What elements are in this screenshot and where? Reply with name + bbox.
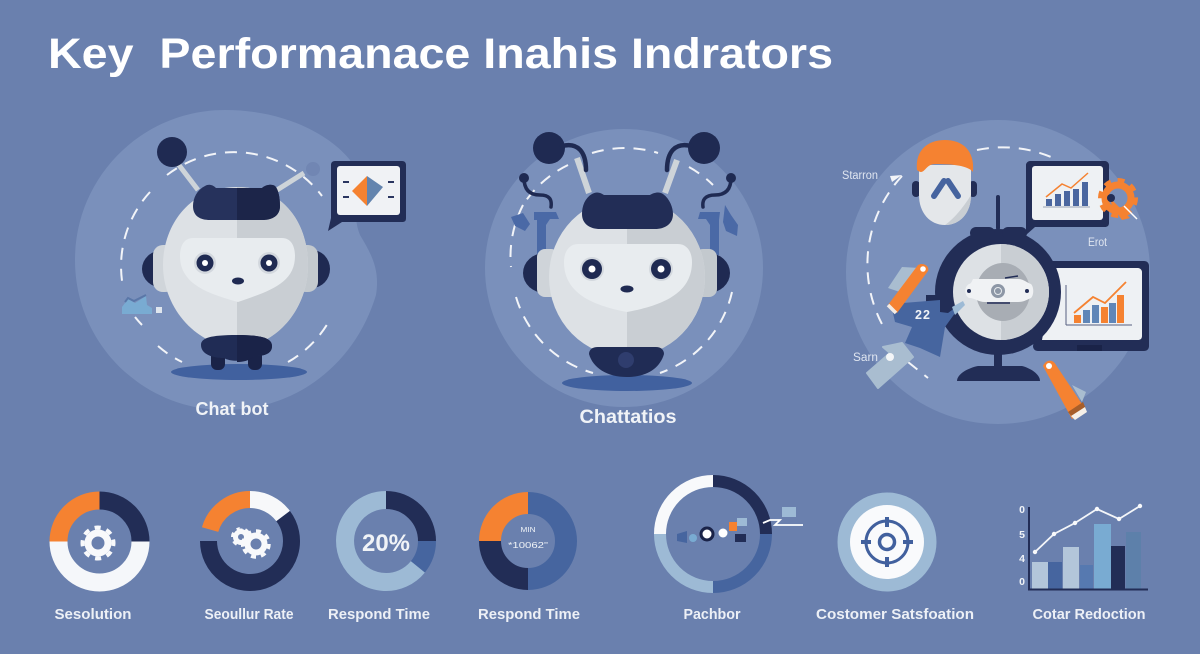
background circle <box>485 129 763 407</box>
face plate <box>180 238 295 302</box>
label: Sesolution <box>54 606 132 623</box>
kpi: cost reduction chart <box>1019 504 1148 623</box>
donut segments <box>208 500 291 583</box>
axis values: 4 <box>1019 553 1025 565</box>
axis values <box>1019 504 1025 588</box>
dashed orbit <box>510 148 732 373</box>
kpi: sesolution donut <box>54 500 140 623</box>
axis values: 0 <box>1019 504 1025 516</box>
side label: Erot <box>1088 237 1108 249</box>
blue side pylons <box>511 205 738 255</box>
base <box>589 347 664 377</box>
face plate <box>564 244 692 312</box>
unit: MIN <box>520 525 536 534</box>
pointer flag <box>763 507 803 525</box>
label: Respond Time <box>478 606 580 623</box>
panel: support hub <box>842 120 1150 424</box>
blue hand tool: 22 <box>915 308 931 322</box>
value: 20% <box>362 530 410 557</box>
kpi: respond time min donut <box>478 503 580 623</box>
label: Chat bot <box>196 399 269 419</box>
antennas <box>157 137 320 190</box>
orange gear <box>1100 180 1137 220</box>
feet <box>201 335 272 370</box>
value: *10062" <box>508 541 548 550</box>
eyes <box>194 252 280 274</box>
bars <box>1032 524 1141 589</box>
donut segments <box>58 500 140 582</box>
label: Seoullur Rate <box>204 606 294 623</box>
kpi: respond time 20% donut <box>328 500 430 623</box>
ring segments <box>660 481 766 587</box>
right orange pen <box>1043 361 1087 420</box>
speech bubble with diamond <box>328 161 406 231</box>
donut segments <box>490 503 566 579</box>
large monitor chart <box>1033 261 1149 351</box>
disc <box>838 492 936 592</box>
shadow <box>562 375 692 391</box>
kpi: success rate donut <box>204 500 294 623</box>
kpi: pachbor ring <box>660 481 803 623</box>
stand and antenna <box>957 195 1040 381</box>
panel: chat bot robot <box>75 110 406 419</box>
dashed orbit <box>121 152 328 362</box>
small monitor chart <box>1026 161 1109 235</box>
cap <box>582 192 673 229</box>
dashed orbit <box>867 147 1051 378</box>
background circle <box>846 120 1150 424</box>
panel: chattatios robot <box>485 129 763 428</box>
person head <box>912 140 977 225</box>
eyes <box>580 257 673 281</box>
cap <box>193 185 280 220</box>
trend line <box>1033 504 1142 554</box>
robot body <box>549 197 705 357</box>
ears <box>142 245 330 292</box>
label: Chattatios <box>580 406 677 428</box>
label: Respond Time <box>328 606 430 623</box>
label: Costomer Satsfoation <box>816 606 974 623</box>
shadow <box>171 364 307 380</box>
orbit arrowhead <box>890 175 902 182</box>
label: Pachbor <box>684 606 741 623</box>
title: Key Performanace Inahis Indrators <box>48 30 833 78</box>
mini chart <box>122 295 162 314</box>
blue hand tool <box>867 295 965 388</box>
nose <box>232 278 244 284</box>
process icons <box>677 518 747 543</box>
robot body <box>163 187 308 347</box>
donut segments <box>345 500 427 582</box>
side label: Sarn <box>853 352 878 364</box>
axes <box>1029 507 1148 590</box>
background circle <box>75 110 377 410</box>
main ring <box>935 227 1061 355</box>
axis values: 5 <box>1019 529 1025 541</box>
side label: Starron <box>842 170 878 182</box>
target icon <box>861 517 913 567</box>
gears icon <box>232 528 269 557</box>
left orange pen <box>888 264 928 313</box>
ears <box>523 249 730 297</box>
antennas <box>519 132 736 207</box>
label: Cotar Redoction <box>1032 606 1146 623</box>
axis values: 0 <box>1019 576 1025 588</box>
nose <box>620 286 634 292</box>
gear icon <box>82 528 114 558</box>
kpi: customer satisfaction <box>816 492 974 623</box>
